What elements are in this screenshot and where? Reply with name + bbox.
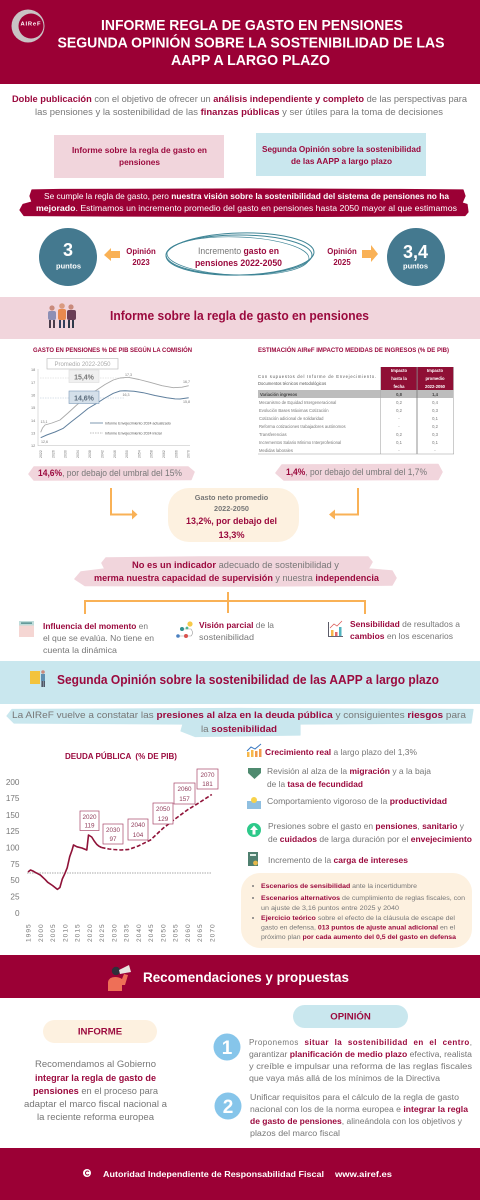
line chart: deuda pública: 0 xyxy=(15,909,20,918)
line chart: gasto en pensiones: 2030 xyxy=(64,450,68,458)
text: recomendación informe: pensiones en el proceso para xyxy=(33,1086,159,1096)
line chart: deuda pública: 181 xyxy=(202,781,213,788)
line chart: deuda pública: 119 xyxy=(84,822,95,830)
line chart: deuda pública: 25 xyxy=(10,892,20,902)
line chart: deuda pública: 2040 xyxy=(136,923,143,942)
table: impacto medidas de ingresos: Mecanismo de Equidad Intergeneracional xyxy=(259,400,336,405)
list item: migración xyxy=(248,766,431,789)
footer xyxy=(0,1148,480,1200)
text: recomendación informe: Recomendamos al Gobierno xyxy=(35,1059,156,1069)
table: impacto medidas de ingresos: 0,1 xyxy=(432,440,439,445)
label: opinión 2023: 2023 xyxy=(132,258,150,267)
line chart: gasto en pensiones xyxy=(31,358,191,458)
item: influencia del momento: Influencia del momento en xyxy=(43,621,148,631)
line chart: gasto en pensiones: Informe Envejecimiento 2024 actualizado xyxy=(105,422,171,426)
table: impacto medidas de ingresos: Cotización adicional de solidaridad xyxy=(259,416,324,421)
proposal 2: nacional con los de la norma europea e integrar la regla xyxy=(250,1105,469,1114)
line chart: deuda pública: 2070 xyxy=(200,772,215,779)
line chart: deuda pública: 2055 xyxy=(172,923,180,942)
icon: productivity xyxy=(247,797,261,809)
arrow: right xyxy=(362,245,378,262)
item: sensibilidad: cambios en los escenarios xyxy=(350,631,453,641)
brush callout: presiones al alza: la sostenibilidad xyxy=(201,723,277,734)
proposal 1: Proponemos situar la sostenibilidad en el centro, xyxy=(249,1038,472,1047)
list item: presiones sobre el gasto: Presiones sobre el gasto en pensiones, sanitario y xyxy=(268,821,465,831)
line chart: gasto en pensiones: 2038 xyxy=(88,450,92,458)
line chart: gasto en pensiones: 2050 xyxy=(125,450,129,458)
pill: 14,6%: 14,6%, por debajo del umbral del 15% xyxy=(38,468,182,478)
line chart: gasto en pensiones: 16,3 xyxy=(122,393,130,397)
line chart: deuda pública: 175 xyxy=(6,794,20,803)
item: visión parcial: Visión parcial de la xyxy=(199,620,274,630)
table: impacto medidas de ingresos: Transferencias xyxy=(259,432,287,437)
line chart: gasto en pensiones: 2046 xyxy=(113,450,117,458)
list item: crecimiento real xyxy=(247,744,417,757)
text: recomendación informe: la reciente reforma europea xyxy=(37,1112,155,1122)
line chart: gasto en pensiones: 2026 xyxy=(51,450,55,458)
line chart: deuda pública: 2065 xyxy=(197,923,204,942)
brush callout: presiones al alza: La AIReF vuelve a constatar las presiones al alza en la deuda pública y consiguientes riesgos para xyxy=(12,709,467,720)
title: AAPP A LARGO PLAZO xyxy=(171,52,330,69)
table: impacto medidas de ingresos: 0,2 xyxy=(396,400,403,405)
line chart: deuda pública: 2030 xyxy=(111,923,118,942)
line chart: gasto en pensiones: 13 xyxy=(31,432,35,436)
line chart: deuda pública: 2035 xyxy=(124,923,131,942)
line chart: gasto en pensiones: 16 xyxy=(31,394,35,398)
label: opinión 2025: Opinión xyxy=(327,247,357,256)
line chart: deuda pública: 150 xyxy=(6,811,20,820)
circle: 3,4 puntos: 3,4 xyxy=(403,242,428,262)
heading: Recomendaciones y propuestas xyxy=(143,969,349,985)
band: segunda opinión xyxy=(0,661,480,704)
panel: escenarios: Escenarios alternativos de cumplimiento de reglas fiscales, con xyxy=(261,895,465,902)
circle: 3,4 puntos: puntos xyxy=(403,262,428,270)
panel: escenarios: Escenarios de sensibilidad ante la incertidumbre xyxy=(261,883,417,890)
item: influencia del momento: el que se evalúa. No tiene en xyxy=(43,633,154,643)
line chart: gasto en pensiones: 18 xyxy=(31,368,35,372)
line chart: gasto en pensiones: 15 xyxy=(31,406,35,410)
intro text: las pensiones y la sostenibilidad de las finanzas públicas y ser útiles para la toma de decisiones xyxy=(35,107,443,117)
table: impacto medidas de ingresos: Variación ingresos xyxy=(260,392,298,397)
list item: presiones sobre el gasto: de cuidados de larga duración por el envejecimiento xyxy=(268,834,472,844)
table: impacto medidas de ingresos: 2022-2050 xyxy=(425,384,446,389)
table: impacto medidas de ingresos: Con supuestos del Informe de Envejecimiento. xyxy=(258,374,376,379)
table: impacto medidas de ingresos: - xyxy=(398,424,400,429)
line chart: deuda pública: 100 xyxy=(6,844,20,852)
bracket connector xyxy=(85,592,365,614)
intro text: Doble publicación con el objetivo de ofrecer un análisis independiente y completo de las perspectivas para xyxy=(12,94,468,104)
pill: 14,6% xyxy=(29,467,194,480)
logo: AIReF xyxy=(12,10,44,42)
brush callout: no es un indicador xyxy=(75,557,396,586)
title xyxy=(58,17,444,69)
item: influencia del momento xyxy=(19,621,154,655)
line chart: gasto en pensiones: 2022 xyxy=(39,450,43,458)
brush callout: conclusion: Se cumple la regla de gasto, pero nuestra visión sobre la sostenibilidad del sistema de pensiones no ha xyxy=(44,191,449,201)
arrow: right connector xyxy=(329,488,358,520)
table: impacto medidas de ingresos: 0,8 xyxy=(396,392,403,397)
band: recomendaciones y propuestas xyxy=(0,955,480,998)
proposal 2: Unificar requisitos para el cálculo de la regla de gasto xyxy=(250,1093,460,1102)
line chart: gasto en pensiones: 2070 xyxy=(187,450,191,458)
ellipse: incremento gasto en pensiones xyxy=(165,231,315,277)
box: informe regla de gasto: pensiones xyxy=(119,158,160,167)
line chart: gasto en pensiones: 14,6% xyxy=(74,396,95,402)
label: opinión 2023: Opinión xyxy=(126,247,156,256)
line chart: gasto en pensiones: 12 xyxy=(31,444,35,448)
box: segunda opinión xyxy=(256,133,426,176)
line chart: deuda pública: 75 xyxy=(10,860,20,869)
table: impacto medidas de ingresos: hasta la xyxy=(391,376,407,381)
line chart: deuda pública: 2000 xyxy=(38,923,45,942)
table: impacto medidas de ingresos: - xyxy=(434,448,436,453)
proposal 1 xyxy=(214,1034,473,1083)
line chart: gasto en pensiones: 13,1 xyxy=(40,420,48,424)
line chart: deuda pública: 50 xyxy=(10,876,20,885)
table: impacto medidas de ingresos: Incrementos Salario Mínimo Interprofesional xyxy=(259,440,341,445)
table: impacto medidas de ingresos: Documentos técnicos metodológicos xyxy=(258,381,326,386)
intro text xyxy=(12,94,468,117)
circle: 3 puntos: 3 xyxy=(63,240,73,260)
item: visión parcial xyxy=(176,620,274,642)
icon: migration xyxy=(248,768,261,779)
footer: www.airef.es xyxy=(334,1169,392,1179)
proposal 1: garantizar planificación de medio plazo efectiva, realista xyxy=(249,1050,473,1059)
line chart: deuda pública: 2050 xyxy=(160,923,167,942)
pill: informe xyxy=(43,1020,157,1043)
item: visión parcial: sostenibilidad xyxy=(199,632,254,642)
table: impacto medidas de ingresos: 0,2 xyxy=(396,432,403,437)
line chart: gasto en pensiones: 16,7 xyxy=(183,380,190,384)
panel: gasto neto promedio: 13,3% xyxy=(218,530,245,540)
list item: presiones sobre el gasto xyxy=(247,821,472,844)
icon: number 2: 2 xyxy=(223,1097,233,1118)
line chart: gasto en pensiones: 12,6 xyxy=(41,440,48,444)
heading: Segunda Opinión sobre la sostenibilidad de las AAPP a largo plazo xyxy=(57,672,439,687)
footer: Autoridad Independiente de Responsabilidad Fiscal xyxy=(103,1169,324,1179)
box: segunda opinión: de las AAPP a largo plazo xyxy=(291,157,392,166)
icon: green up arrow xyxy=(247,823,261,837)
line chart: deuda pública: 2050 xyxy=(156,806,170,813)
brush callout: no es un indicador: merma nuestra capacidad de supervisión y nuestra independencia xyxy=(94,573,379,583)
panel: escenarios: Ejercicio teórico sobre el efecto de la cláusula de escape del xyxy=(261,915,456,922)
table: impacto medidas de ingresos: 1,4 xyxy=(432,392,439,397)
table: impacto medidas de ingresos: Impacto xyxy=(427,368,443,373)
line chart: deuda pública xyxy=(6,769,218,942)
heading: Informe sobre la regla de gasto en pensiones xyxy=(110,308,369,323)
table: impacto medidas de ingresos: fecha xyxy=(394,384,405,389)
line chart: gasto en pensiones: 17,3 xyxy=(125,373,132,377)
line chart: deuda pública: 2030 xyxy=(106,827,120,834)
label: opinión 2023 xyxy=(126,247,156,267)
table: impacto medidas de ingresos: 0,1 xyxy=(396,440,403,445)
text: recomendación informe xyxy=(24,1059,168,1122)
circle: 3 puntos: puntos xyxy=(56,262,81,270)
list item: migración: Revisión al alza de la migración y a la baja xyxy=(267,766,431,776)
table: impacto medidas de ingresos: 0,3 xyxy=(432,432,439,437)
circle: 3,4 puntos xyxy=(387,228,445,286)
proposal 1: y creíble e impulsar una reforma de las reglas fiscales xyxy=(249,1062,472,1071)
box: segunda opinión: Segunda Opinión sobre la sostenibilidad xyxy=(262,145,421,154)
icon: calendar xyxy=(19,621,34,637)
table heading: estimación AIReF: ESTIMACIÓN AIReF IMPACTO MEDIDAS DE INGRESOS (% DE PIB) xyxy=(258,346,449,354)
item: influencia del momento: cuenta la dinámica xyxy=(43,645,117,655)
label: opinión 2025: 2025 xyxy=(333,258,351,267)
table: impacto medidas de ingresos: - xyxy=(398,416,400,421)
line chart: deuda pública: 2010 xyxy=(62,923,69,942)
list item: productividad xyxy=(247,796,447,809)
table: impacto medidas de ingresos: 0,1 xyxy=(432,416,439,421)
table: impacto medidas de ingresos: 0,2 xyxy=(396,408,403,413)
icon: growth xyxy=(247,744,262,757)
ellipse: incremento gasto en pensiones: Incremento gasto en xyxy=(198,246,279,256)
line chart: deuda pública: 2060 xyxy=(177,786,192,793)
line chart: gasto en pensiones: 15,8 xyxy=(183,400,190,404)
table: impacto medidas de ingresos: 0,2 xyxy=(432,424,439,429)
text: recomendación informe: adaptar el marco fiscal nacional a xyxy=(24,1099,168,1109)
line chart: deuda pública: 2045 xyxy=(148,923,155,942)
line chart: deuda pública: 2025 xyxy=(99,923,106,942)
proposal 2: plazos del marco fiscal xyxy=(250,1129,340,1138)
line chart: deuda pública: 129 xyxy=(158,816,169,823)
table: impacto medidas de ingresos: - xyxy=(398,448,400,453)
icon: vision path xyxy=(176,621,193,638)
logo: AIReF: AIReF xyxy=(20,22,41,28)
line chart: deuda pública: 104 xyxy=(133,832,144,839)
line chart: deuda pública: 200 xyxy=(6,778,20,787)
line chart: gasto en pensiones: 2054 xyxy=(137,450,141,458)
panel: escenarios: un ajuste de 3,16 puntos entre 2025 y 2040 xyxy=(261,905,399,912)
item: sensibilidad: Sensibilidad de resultados a xyxy=(350,619,460,629)
table: impacto medidas de ingresos: promedio xyxy=(425,376,445,381)
panel: gasto neto promedio xyxy=(168,488,299,542)
line chart: gasto en pensiones: 2058 xyxy=(150,450,154,458)
table: impacto medidas de ingresos xyxy=(258,367,454,454)
table: impacto medidas de ingresos: Medidas laborales xyxy=(259,448,293,453)
box: informe regla de gasto: Informe sobre la regla de gasto en xyxy=(72,146,207,155)
icon: megaphone person xyxy=(108,965,131,991)
list item: migración: de la tasa de fecundidad xyxy=(267,779,363,789)
line chart: gasto en pensiones: Informe Envejecimiento 2024 inicial xyxy=(105,432,162,436)
panel: escenarios: gasto en defensa, 013 puntos de ajuste anual adicional en el xyxy=(261,924,456,932)
line chart: deuda pública: 2020 xyxy=(82,814,97,821)
band: informe sobre la regla de gasto xyxy=(0,297,480,339)
panel: gasto neto promedio: 2022-2050 xyxy=(214,504,249,513)
panel: escenarios xyxy=(241,873,472,948)
line chart: gasto en pensiones: 14 xyxy=(31,419,35,423)
chart heading: deuda pública: DEUDA PÚBLICA (% DE PIB) xyxy=(65,752,177,761)
line chart: deuda pública: 97 xyxy=(109,836,117,843)
text: recomendación informe: integrar la regla de gasto de xyxy=(35,1073,156,1083)
pill: 1,4%: 1,4%, por debajo del umbral del 1,7% xyxy=(286,467,427,477)
arrow: left xyxy=(104,248,120,261)
brush callout: no es un indicador: No es un indicador adecuado de sostenibilidad y xyxy=(132,560,340,570)
pill: 1,4% xyxy=(276,464,442,480)
icon: number 2 xyxy=(214,1092,242,1120)
line chart: deuda pública: 1995 xyxy=(26,923,32,942)
line chart: deuda pública: 2070 xyxy=(209,923,216,942)
list item: productividad: Comportamiento vigoroso de la productividad xyxy=(267,796,447,806)
icon: interest xyxy=(248,852,258,866)
line chart: deuda pública: 2005 xyxy=(50,923,57,942)
circle: 3 puntos xyxy=(39,228,97,286)
icon: copyright xyxy=(83,1169,91,1177)
table: impacto medidas de ingresos: 0,4 xyxy=(432,400,439,405)
table: impacto medidas de ingresos: Impacto xyxy=(391,368,407,373)
title: INFORME REGLA DE GASTO EN PENSIONES xyxy=(101,17,403,34)
header band xyxy=(0,0,480,84)
line chart: gasto en pensiones: 2066 xyxy=(174,450,178,458)
line chart: gasto en pensiones: 17 xyxy=(31,381,35,385)
line chart: deuda pública: 2020 xyxy=(87,923,94,942)
line chart: deuda pública: 157 xyxy=(179,796,190,803)
box: informe regla de gasto xyxy=(54,135,224,178)
brush callout: conclusion xyxy=(20,189,468,216)
table: impacto medidas de ingresos: Evolución Bases Máximas Cotización xyxy=(259,408,329,413)
brush callout: conclusion: mejorado. Estimamos un incremento promedio del gasto en pensiones hasta 2050 mayor al que estimamos xyxy=(36,203,457,213)
icon: number 1: 1 xyxy=(222,1038,233,1059)
table: impacto medidas de ingresos: Reforma cotizaciones trabajadores autónomos xyxy=(259,424,346,429)
label: opinión 2025 xyxy=(327,247,357,267)
pill: opinión: OPINIÓN xyxy=(330,1010,371,1022)
icon: people xyxy=(48,303,76,328)
panel: gasto neto promedio: Gasto neto promedio xyxy=(195,493,269,502)
title: SEGUNDA OPINIÓN SOBRE LA SOSTENIBILIDAD DE LAS xyxy=(58,34,444,52)
list item: crecimiento real: Crecimiento real a largo plazo del 1,3% xyxy=(265,747,417,757)
icon: bar chart xyxy=(328,621,343,636)
line chart: deuda pública: 2040 xyxy=(131,822,145,829)
arrow: left connector xyxy=(111,488,138,520)
line chart: deuda pública: 2060 xyxy=(185,923,192,942)
proposal 2 xyxy=(214,1092,469,1138)
list item: carga de intereses xyxy=(248,852,408,866)
panel: escenarios: próximo plan por cada aumento del 0,5 del gasto en defensa xyxy=(261,934,456,941)
pill: opinión xyxy=(293,1005,408,1028)
line chart: deuda pública: 125 xyxy=(6,827,20,836)
chart heading: gasto en pensiones: GASTO EN PENSIONES % DE PIB SEGÚN LA COMISIÓN xyxy=(33,346,193,354)
list item: carga de intereses: Incremento de la carga de intereses xyxy=(268,855,408,865)
brush callout: presiones al alza xyxy=(7,708,473,736)
pill: informe: INFORME xyxy=(78,1026,123,1038)
item: sensibilidad xyxy=(328,619,460,641)
icon: number 1 xyxy=(214,1034,240,1060)
line chart: gasto en pensiones: 2062 xyxy=(162,450,166,458)
panel: gasto neto promedio: 13,2%, por debajo del xyxy=(186,516,277,526)
proposal 2: de gasto de pensiones , alineándola con los objetivos y xyxy=(250,1117,462,1126)
ellipse: incremento gasto en pensiones: pensiones 2022-2050 xyxy=(195,258,282,268)
proposal 1: que vaya más allá de los mínimos de la Directiva xyxy=(249,1074,441,1083)
icon: person with board xyxy=(30,670,45,687)
line chart: gasto en pensiones: 2042 xyxy=(100,450,104,458)
line chart: gasto en pensiones: Promedio 2022-2050 xyxy=(54,362,111,368)
line chart: gasto en pensiones: 2034 xyxy=(76,450,80,458)
line chart: gasto en pensiones: 15,4% xyxy=(74,374,95,382)
line chart: deuda pública: 2015 xyxy=(74,923,82,942)
table: impacto medidas de ingresos: 0,3 xyxy=(432,408,439,413)
